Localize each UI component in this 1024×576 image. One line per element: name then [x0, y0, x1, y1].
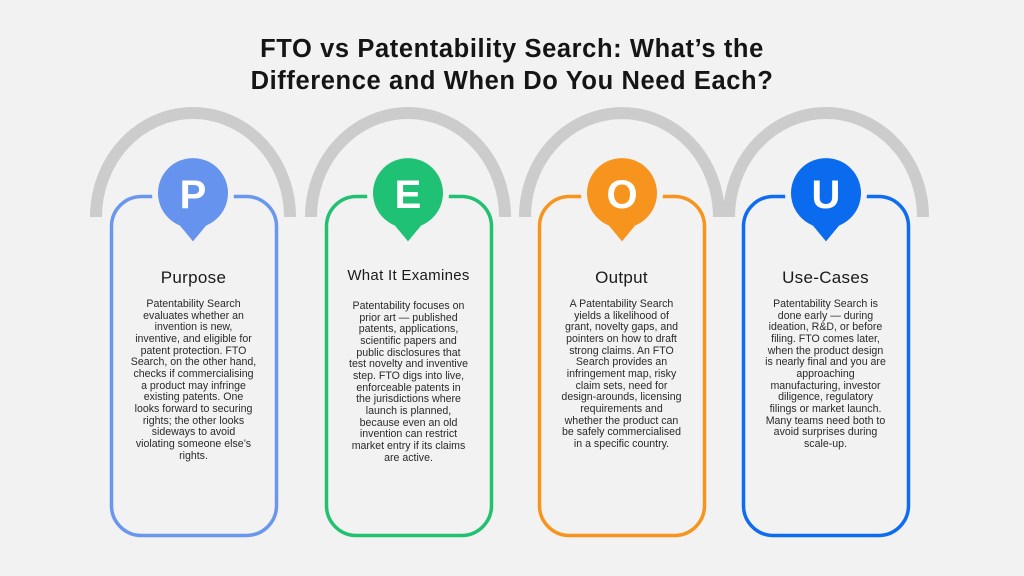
background arcs and pins: E: [395, 173, 421, 217]
text: purpose: patent protection. FTO: [141, 345, 246, 357]
text: what it examines: test novelty and inventive: [349, 358, 468, 370]
text: output: pointers on how to draft: [566, 333, 677, 345]
title: [251, 35, 773, 95]
text: output: be safely commercialised: [562, 426, 681, 438]
text: purpose: rights.: [179, 450, 208, 462]
text: use-cases: [765, 298, 886, 450]
text: purpose: invention is new,: [155, 321, 232, 333]
panel: use-cases: [765, 268, 886, 450]
text: what it examines: step. FTO digs into live,: [353, 370, 464, 382]
text: output: strong claims. An FTO: [569, 345, 674, 357]
text: what it examines: launch is planned,: [366, 405, 451, 417]
text: what it examines: invention can restrict: [360, 428, 457, 440]
text: purpose: a product may infringe: [141, 380, 246, 392]
text: what it examines: Patentability focuses on: [353, 300, 464, 312]
text: output: infringement map, risky: [567, 368, 676, 380]
title: FTO vs Patentability Search: What’s the: [260, 35, 764, 63]
text: use-cases: Many teams need both to: [766, 415, 885, 427]
text: output: Search provides an: [576, 356, 667, 368]
text: output: yields a likelihood of: [574, 310, 669, 322]
card outlines: [112, 196, 276, 536]
text: use-cases: diligence, regulatory: [778, 391, 873, 403]
text: what it examines: public disclosures that: [356, 347, 461, 359]
text: what it examines: market entry if its claims: [352, 440, 465, 452]
text: purpose: inventive, and eligible for: [135, 333, 252, 345]
text: what it examines: scientific papers and: [360, 335, 457, 347]
text: use-cases: Patentability Search is: [773, 298, 878, 310]
text: use-cases: avoid surprises during: [774, 426, 877, 438]
text: what it examines: the jurisdictions where: [356, 393, 461, 405]
text: output: [561, 298, 682, 450]
text: use-cases: approaching: [796, 368, 855, 380]
heading: what it examines: What It Examines: [347, 267, 470, 284]
panel: what it examines: [347, 267, 470, 464]
background arcs and pins: O: [606, 173, 638, 217]
pins: [155, 155, 864, 246]
text: purpose: existing patents. One: [144, 391, 243, 403]
text: purpose: checks if commercialising: [133, 368, 254, 380]
text: what it examines: because even an old: [360, 417, 457, 429]
text: output: claim sets, need for: [576, 380, 667, 392]
text: output: whether the product can: [565, 415, 678, 427]
text: what it examines: enforceable patents in: [356, 382, 461, 394]
background arcs and pins: U: [812, 173, 840, 217]
title: Difference and When Do You Need Each?: [251, 67, 773, 95]
text: output: requirements and: [580, 403, 663, 415]
text: use-cases: done early — during: [778, 310, 873, 322]
text: purpose: violating someone else’s: [136, 438, 251, 450]
text: use-cases: scale-up.: [804, 438, 847, 450]
text: use-cases: filing. FTO comes later,: [771, 333, 880, 345]
text: use-cases: ideation, R&D, or before: [769, 321, 882, 333]
heading: output: Output: [595, 268, 648, 287]
text: purpose: [131, 298, 256, 462]
text: purpose: Search, on the other hand,: [131, 356, 256, 368]
text: output: design-arounds, licensing: [561, 391, 682, 403]
text: use-cases: manufacturing, investor: [770, 380, 881, 392]
text: purpose: Patentability Search: [146, 298, 241, 310]
text: what it examines: prior art — published: [359, 312, 458, 324]
heading: use-cases: Use-Cases: [782, 268, 869, 287]
heading: purpose: Purpose: [161, 268, 226, 287]
text: purpose: sideways to avoid: [152, 426, 235, 438]
gray arcs: [96, 113, 923, 217]
text: purpose: looks forward to securing: [135, 403, 252, 415]
text: purpose: evaluates whether an: [143, 310, 244, 322]
text: output: in a specific country.: [574, 438, 669, 450]
text: output: A Patentability Search: [570, 298, 673, 310]
text: purpose: rights; the other looks: [143, 415, 244, 427]
text: what it examines: [349, 300, 468, 464]
panel: output: [561, 268, 682, 450]
text: what it examines: are active.: [384, 452, 433, 464]
text: use-cases: filings or market launch.: [770, 403, 881, 415]
text: output: grant, novelty gaps, and: [565, 321, 678, 333]
panel: purpose: [131, 268, 256, 462]
text: use-cases: is nearly final and you are: [765, 356, 886, 368]
text: use-cases: when the product design: [768, 345, 883, 357]
background arcs and pins: P: [180, 173, 206, 217]
text: what it examines: patents, applications,: [359, 323, 458, 335]
